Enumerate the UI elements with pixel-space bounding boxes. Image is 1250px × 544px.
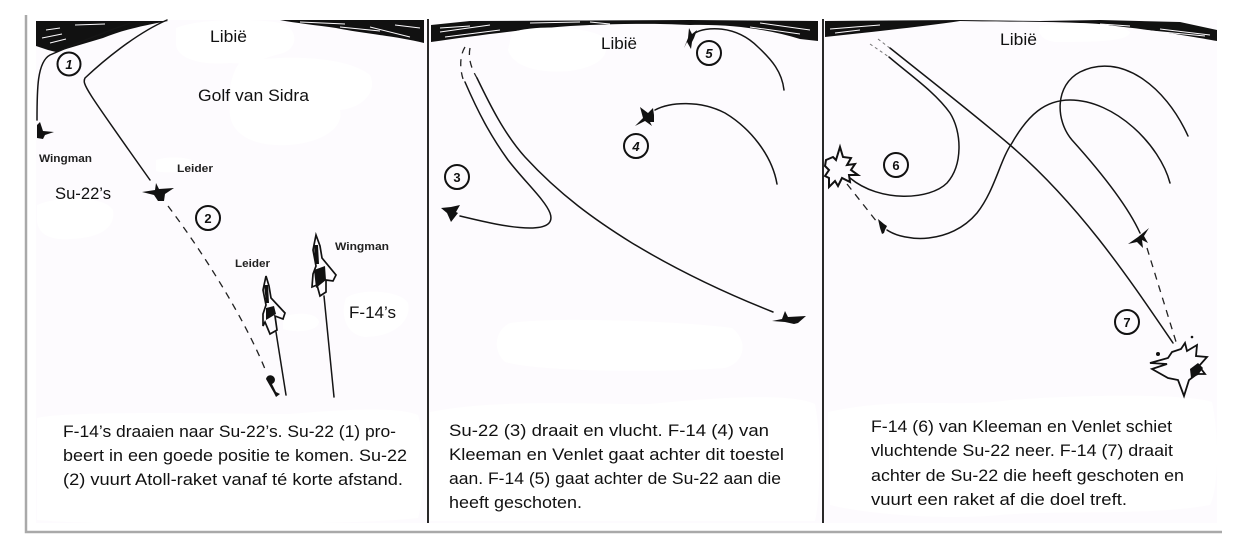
- text: Libië: Libië: [601, 35, 637, 53]
- marker 2: [196, 206, 220, 230]
- icon: F-14 (far right): [772, 311, 806, 324]
- flight path: Su-22 (6): [850, 57, 959, 196]
- land: Libya coast: [825, 20, 1217, 41]
- label: Su-22's: Su-22’s: [55, 185, 111, 203]
- icon: Su-22 wingman: [37, 122, 54, 139]
- icon: F-14 (7): [1128, 228, 1149, 248]
- flight path: S-curve: [887, 100, 1170, 238]
- marker 7: 7: [1123, 315, 1131, 330]
- label: Leider F-14: Leider: [235, 258, 271, 270]
- marker 1: [58, 52, 80, 76]
- caption panel 1: (2) vuurt Atoll-raket vanaf té korte afstand.: [63, 471, 403, 489]
- marker 5: [697, 41, 721, 65]
- icon: Su-22 leader: [142, 183, 174, 201]
- label: Leider: Leider: [177, 163, 214, 175]
- caption panel 1: F-14’s draaien naar Su-22’s. Su-22 (1) pro-: [63, 423, 396, 441]
- flight path: F-14 long: [477, 78, 773, 312]
- marker 6: [884, 153, 908, 177]
- flight path: upper loop: [1060, 66, 1188, 233]
- text: Libië: Libië: [1000, 31, 1037, 49]
- label: Wingman: Wingman: [39, 153, 92, 165]
- label: Wingman F-14: Wingman: [335, 241, 389, 253]
- icon: F-14 leader: [263, 276, 285, 334]
- flight path: Su-22 (3): [460, 82, 551, 228]
- flight path: F-14 (4): [655, 104, 777, 184]
- dashed missile 7: [1147, 248, 1177, 345]
- white caption patch: [828, 396, 1217, 517]
- marker 4: 4: [631, 139, 640, 154]
- icon: F-14 wingman: [312, 235, 336, 296]
- icon: Su-22 target: [878, 219, 887, 234]
- caption panel 2: [449, 422, 784, 512]
- icon: burst 6: [825, 147, 858, 187]
- label: F-14's: F-14’s: [349, 304, 396, 322]
- dashed missile 6: [847, 184, 877, 222]
- text: Libië: Libië: [210, 28, 247, 46]
- dashed path ends: [870, 39, 891, 57]
- flight path: Su-22 wingman: [37, 23, 130, 120]
- panel: F-14's turn towards Su-22's: [36, 20, 428, 524]
- caption panel 3: achter de Su-22 die heeft geschoten en: [871, 467, 1184, 485]
- caption panel 2: aan. F-14 (5) gaat achter de Su-22 aan die: [449, 470, 781, 488]
- land: Libya coast: [36, 20, 424, 52]
- flight path: F-14 (6): [890, 48, 1173, 343]
- burst shadow: [1190, 363, 1203, 378]
- panel: F-14 shoots down Su-22: [824, 20, 1217, 523]
- white label patches: [37, 20, 423, 524]
- marker 3: [445, 165, 469, 189]
- flight path: F-14 leader: [276, 332, 286, 395]
- divider: [427, 19, 429, 523]
- white label patch: [1039, 23, 1130, 42]
- flight path: F-14 wingman: [324, 296, 334, 397]
- caption panel 3: [871, 418, 1184, 509]
- icon: missile: [266, 375, 280, 397]
- marker 3: 3: [453, 170, 461, 185]
- icon: F-14 (4): [635, 107, 654, 126]
- icon: burst 7: [1150, 343, 1207, 396]
- caption panel 3: vluchtende Su-22 neer. F-14 (7) draait: [871, 442, 1173, 460]
- caption panel 3: vuurt een raket af die doel treft.: [871, 491, 1127, 509]
- caption panel 2: Kleeman en Venlet gaat achter dit toestel: [449, 446, 784, 464]
- flight path: Su-22 leader: [84, 20, 167, 180]
- caption panel 2: heeft geschoten.: [449, 494, 582, 512]
- white label patch: [508, 27, 606, 72]
- flight path: F-14 (5): [695, 29, 784, 90]
- divider: [822, 19, 824, 523]
- marker 5: 5: [705, 46, 713, 61]
- caption panel 1: beert in een goede positie te komen. Su-22: [63, 447, 407, 465]
- panel: Su-22 flees: [429, 20, 823, 523]
- marker 1: 1: [65, 57, 73, 72]
- white caption patch: [430, 397, 820, 521]
- caption panel 3: F-14 (6) van Kleeman en Venlet schiet: [871, 418, 1172, 436]
- text: Golf van Sidra: Golf van Sidra: [198, 87, 310, 105]
- caption panel 1: [63, 423, 407, 489]
- marker 2: 2: [204, 211, 212, 226]
- marker 7: [1115, 310, 1139, 334]
- marker 4: [624, 134, 648, 158]
- land: Libya coast: [431, 20, 818, 42]
- white patch mid: [497, 320, 743, 371]
- burst debris: [1156, 336, 1193, 356]
- dashed path ends: [461, 47, 465, 82]
- marker 6: 6: [892, 158, 900, 173]
- missile track dashed: [168, 206, 265, 369]
- icon: Su-22 (3): [441, 205, 460, 222]
- icon: F-14 (5): [684, 28, 697, 49]
- caption panel 2: Su-22 (3) draait en vlucht. F-14 (4) van: [449, 422, 769, 440]
